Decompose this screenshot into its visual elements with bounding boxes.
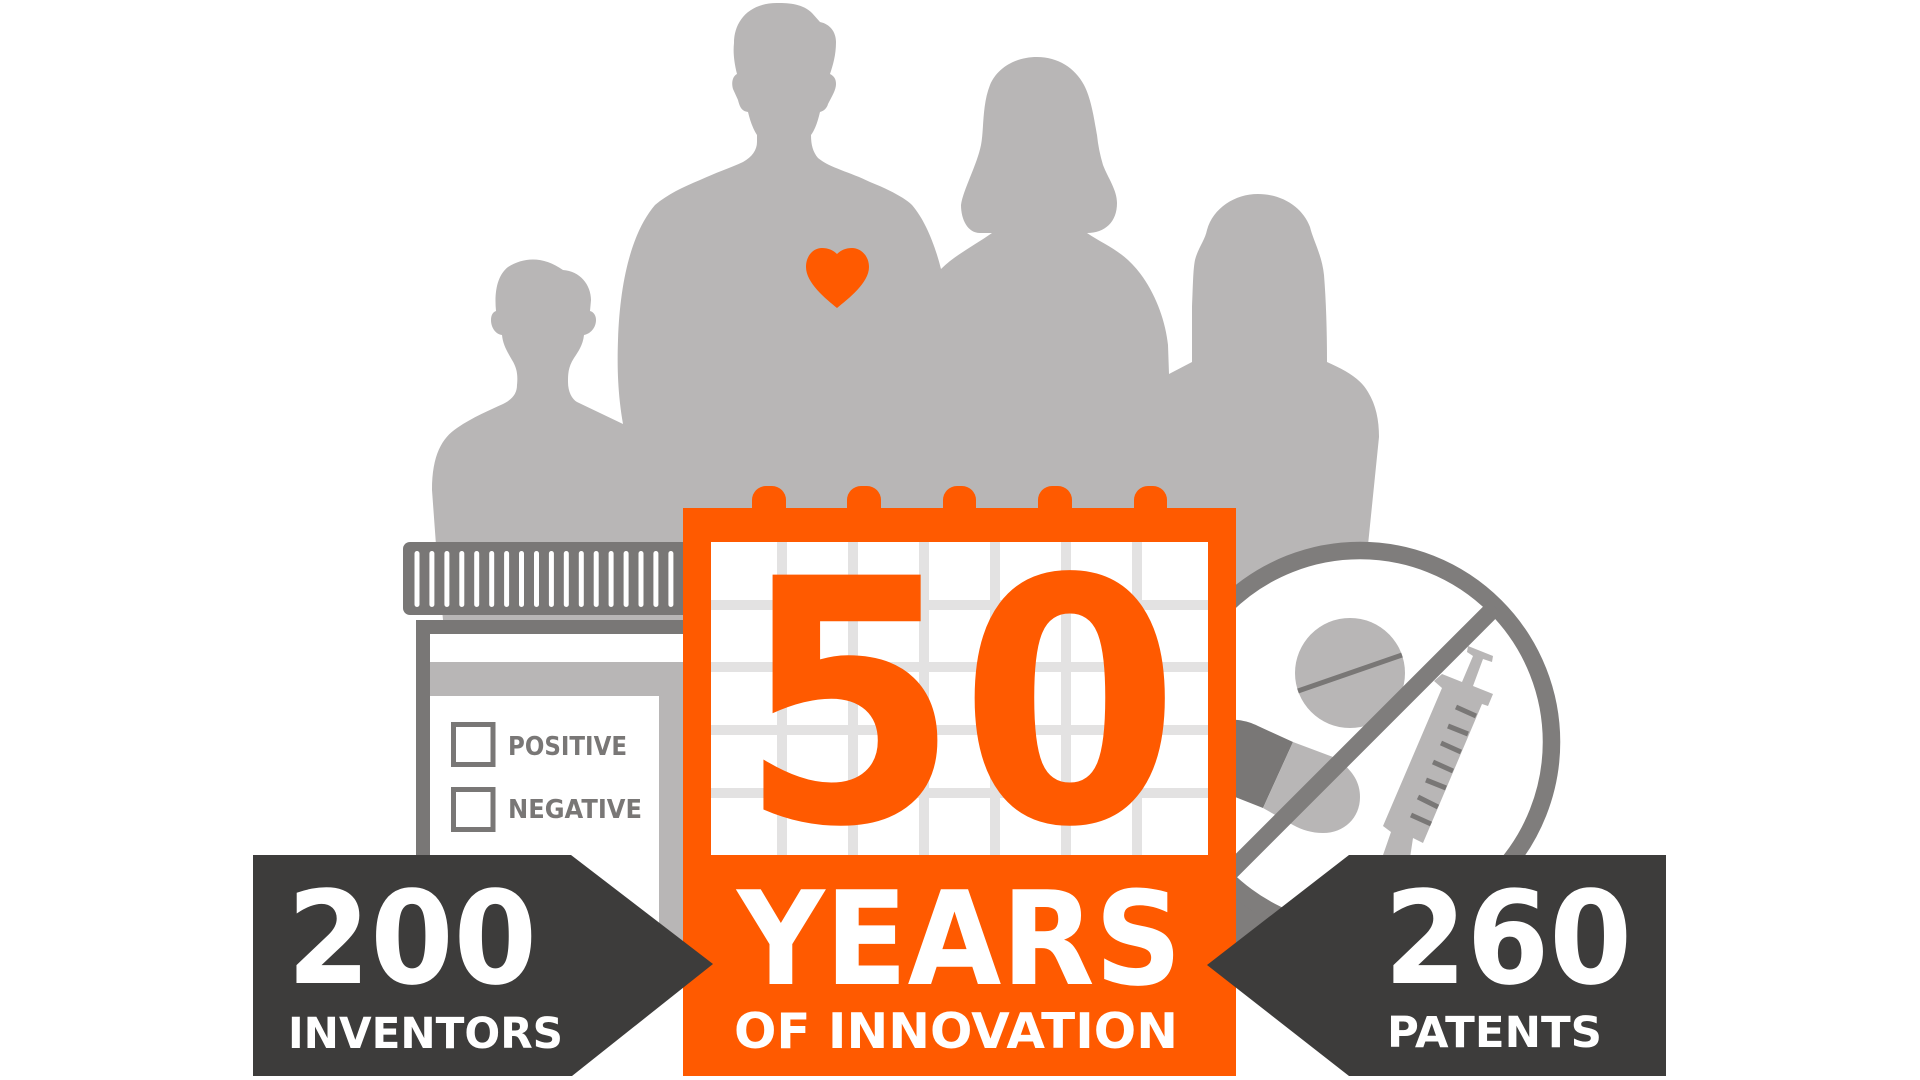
- label: negative: NEGATIVE: [508, 795, 642, 825]
- calendar: [683, 486, 1236, 1076]
- jar body: [416, 620, 683, 960]
- family silhouettes: [432, 3, 1379, 640]
- icon: no-medicine prohibition sign: [1130, 550, 1552, 972]
- icon: medicine jar: [403, 542, 693, 960]
- number: 260: 260: [1384, 864, 1632, 1014]
- icon: capsule: [1225, 719, 1360, 833]
- checkbox: negative: [454, 790, 493, 830]
- jar cap: [403, 542, 693, 615]
- icon: heart: [806, 248, 869, 308]
- calendar rings: [752, 486, 1167, 520]
- subheading: of innovation: OF INNOVATION: [734, 1003, 1178, 1060]
- icon: tablet: [1295, 618, 1405, 728]
- checkbox: positive: [454, 724, 493, 764]
- number: 200: 200: [287, 864, 537, 1014]
- label: patents: PATENTS: [1387, 1008, 1602, 1058]
- big number 50: 50: [739, 507, 1180, 901]
- callout: inventors: [253, 855, 713, 1076]
- callout: patents: [1207, 855, 1666, 1076]
- heading: years: YEARS: [735, 863, 1182, 1015]
- icon: syringe: [1382, 646, 1493, 858]
- label: inventors: INVENTORS: [288, 1009, 563, 1059]
- label: positive: POSITIVE: [508, 732, 627, 762]
